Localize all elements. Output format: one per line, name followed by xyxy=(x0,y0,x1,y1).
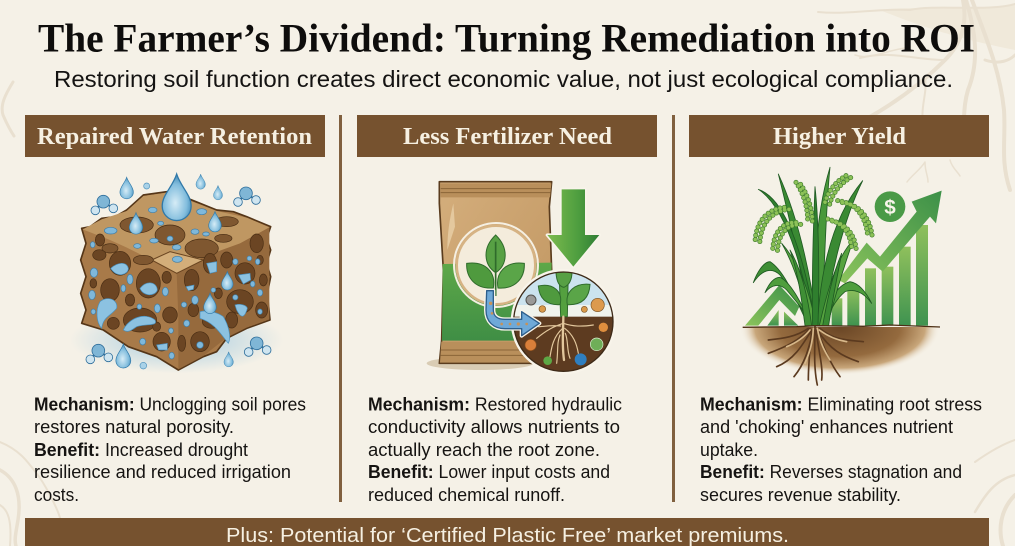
text: yield mechanism and benefit: secures revenue stability. xyxy=(700,484,901,505)
text: fertilizer mechanism and benefit: Mechanism: Restored hydraulic xyxy=(368,394,622,414)
bottom callout banner xyxy=(25,518,989,546)
icon: porous soil cube with water drops xyxy=(70,174,283,373)
background roots: bottom right xyxy=(975,440,1015,546)
text: water retention mechanism and benefit: Mechanism: Unclogging soil pores xyxy=(34,394,306,414)
rice leaves xyxy=(753,167,872,326)
heading: less fertilizer need: Less Fertilizer Need xyxy=(403,124,613,150)
water molecules xyxy=(91,195,118,215)
sprout on bag xyxy=(467,235,524,296)
text: water retention mechanism and benefit xyxy=(34,394,306,505)
background roots: left edge xyxy=(0,82,60,546)
dollar coin xyxy=(875,191,905,222)
water drops xyxy=(162,174,191,221)
text: fertilizer mechanism and benefit: reduced chemical runoff. xyxy=(368,484,565,505)
heading: repaired water retention: Repaired Water Retention xyxy=(37,124,312,150)
trapped water xyxy=(97,262,251,350)
text: water retention mechanism and benefit: costs. xyxy=(34,484,79,505)
ground line xyxy=(743,325,940,327)
text: yield mechanism and benefit: uptake. xyxy=(700,439,758,460)
heading: higher yield: Higher Yield xyxy=(773,124,907,150)
text: water retention mechanism and benefit: resilience and reduced irrigation xyxy=(34,461,291,482)
text: fertilizer mechanism and benefit xyxy=(368,394,622,505)
background roots: top right xyxy=(818,0,1015,190)
roots xyxy=(768,327,863,385)
icon: fertilizer bag with root zone lens xyxy=(427,182,617,374)
heading: less fertilizer need xyxy=(357,115,657,157)
text: yield mechanism and benefit xyxy=(700,394,982,505)
heading: higher yield xyxy=(689,115,989,157)
bars xyxy=(767,225,928,326)
panel: higher yield xyxy=(689,115,989,505)
soil pores xyxy=(90,217,268,352)
text: yield mechanism and benefit: Mechanism: Eliminating root stress xyxy=(700,394,982,414)
small water pores xyxy=(89,207,263,359)
dollar coin: $ xyxy=(884,196,896,219)
icon: rice plant with rising chart xyxy=(740,167,942,385)
text: yield mechanism and benefit: Benefit: Reverses stagnation and xyxy=(700,461,962,482)
divider right xyxy=(672,115,675,502)
rising arrow xyxy=(745,285,799,326)
text: fertilizer mechanism and benefit: Benefit: Lower input costs and xyxy=(368,461,610,482)
panel: less fertilizer need xyxy=(357,115,657,505)
text: yield mechanism and benefit: and 'choking' enhances nutrient xyxy=(700,416,953,437)
divider left xyxy=(339,115,342,502)
green down arrow xyxy=(547,189,599,267)
text: water retention mechanism and benefit: restores natural porosity. xyxy=(34,416,234,437)
text: fertilizer mechanism and benefit: actually reach the root zone. xyxy=(368,439,600,460)
lens circle xyxy=(511,269,616,374)
title: The Farmer’s Dividend: Turning Remediation into ROI xyxy=(38,16,975,60)
subtitle: Restoring soil function creates direct economic value, not just ecological compliance. xyxy=(54,66,953,92)
soil mound xyxy=(744,327,936,373)
heading: repaired water retention xyxy=(25,115,325,157)
blue nutrient arrow xyxy=(486,291,539,336)
text: water retention mechanism and benefit: Benefit: Increased drought xyxy=(34,439,248,460)
text: fertilizer mechanism and benefit: conductivity allows nutrients to xyxy=(368,416,620,437)
rice panicles xyxy=(755,176,872,254)
panel: repaired water retention xyxy=(25,115,325,505)
